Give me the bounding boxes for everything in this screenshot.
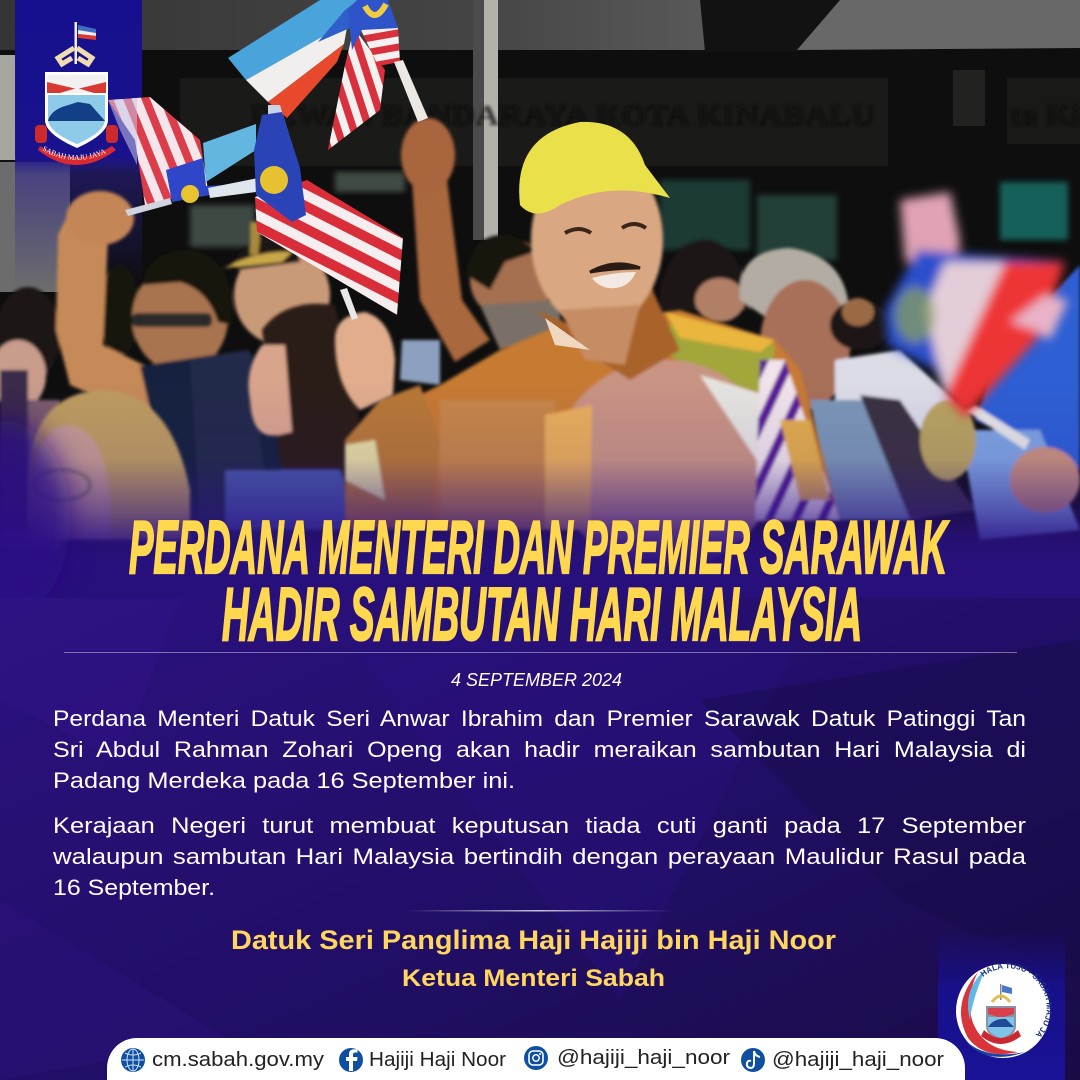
paragraph 2	[52, 813, 1027, 900]
woman in hijab	[28, 390, 190, 540]
signatory title: Ketua Menteri Sabah	[402, 965, 665, 992]
paragraph 1	[53, 706, 1026, 793]
crest scroll	[35, 125, 118, 165]
paragraph 2: 16 September.	[53, 875, 215, 900]
facebook link: Hajiji Haji Noor	[369, 1049, 506, 1071]
crowd right	[660, 240, 1080, 540]
minister: head and cap	[519, 122, 670, 365]
instagram link: @hajiji_haji_noor	[557, 1047, 730, 1069]
Malaysia flag top	[328, 0, 428, 150]
paragraph 2: Kerajaan Negeri turut membuat keputusan tiada cuti ganti pada 17 September	[53, 813, 1026, 838]
ornament divider	[405, 910, 673, 912]
Malaysia flag left	[108, 97, 300, 216]
paragraph 1: Sri Abdul Rahman Zohari Openg akan hadir meraikan sambutan Hari Malaysia di	[53, 737, 1026, 762]
paragraph 1: Perdana Menteri Datuk Seri Anwar Ibrahim dan Premier Sarawak Datuk Patinggi Tan	[53, 706, 1026, 731]
logo crest	[981, 984, 1021, 1044]
crowd left	[0, 191, 330, 550]
building facade	[0, 0, 1080, 560]
crest scroll: SABAH MAJU JAYA	[42, 146, 106, 160]
minister moustache	[590, 264, 640, 272]
crest flag	[74, 22, 96, 64]
minister eyes	[565, 224, 646, 233]
Sabah state flag	[228, 0, 358, 118]
crest: Sabah coat of arms	[35, 22, 118, 165]
minister: fist	[335, 312, 395, 410]
social links bar	[107, 1038, 965, 1080]
round logo: Hala Tuju Sabah Maju Jaya: HALA TUJU • SABAH MAJU JAYA	[980, 962, 1052, 1037]
paragraph 2: walaupun sambutan Hari Malaysia bertindih dengan perayaan Maulidur Rasul pada	[52, 844, 1027, 869]
purple lower panel	[0, 598, 1080, 1080]
tiktok link	[741, 1048, 944, 1072]
blue overlay fade	[0, 380, 1080, 600]
blue panel behind crest	[15, 0, 142, 290]
woman with long hair	[225, 304, 365, 530]
blue panel behind round logo	[938, 930, 1065, 1080]
minister cap	[519, 122, 670, 214]
Malaysia flag large	[254, 112, 403, 320]
instagram link	[524, 1046, 730, 1070]
date: 4 SEPTEMBER 2024	[451, 670, 622, 690]
title divider	[64, 652, 1017, 653]
building sign	[250, 100, 1080, 132]
signatory name: Datuk Seri Panglima Haji Hajiji bin Haji Noor	[231, 925, 837, 955]
tiktok link: @hajiji_haji_noor	[772, 1049, 944, 1071]
blurred flags right	[885, 192, 1068, 418]
building sign: DEWAN BANDARAYA KOTA KINABALU	[250, 100, 875, 132]
paragraph 1: Padang Merdeka pada 16 September ini.	[53, 768, 515, 793]
crest shield	[45, 72, 108, 148]
minister smile	[592, 272, 636, 288]
building sign: ta Ki	[1010, 100, 1080, 132]
minister: shirt	[345, 285, 840, 570]
background photo: crowd waving flags	[0, 0, 1080, 620]
left edge haze	[0, 420, 70, 620]
website link: cm.sabah.gov.my	[152, 1049, 324, 1071]
crest arms	[58, 48, 92, 64]
title	[129, 505, 949, 656]
raised arm behind minister	[400, 118, 560, 385]
